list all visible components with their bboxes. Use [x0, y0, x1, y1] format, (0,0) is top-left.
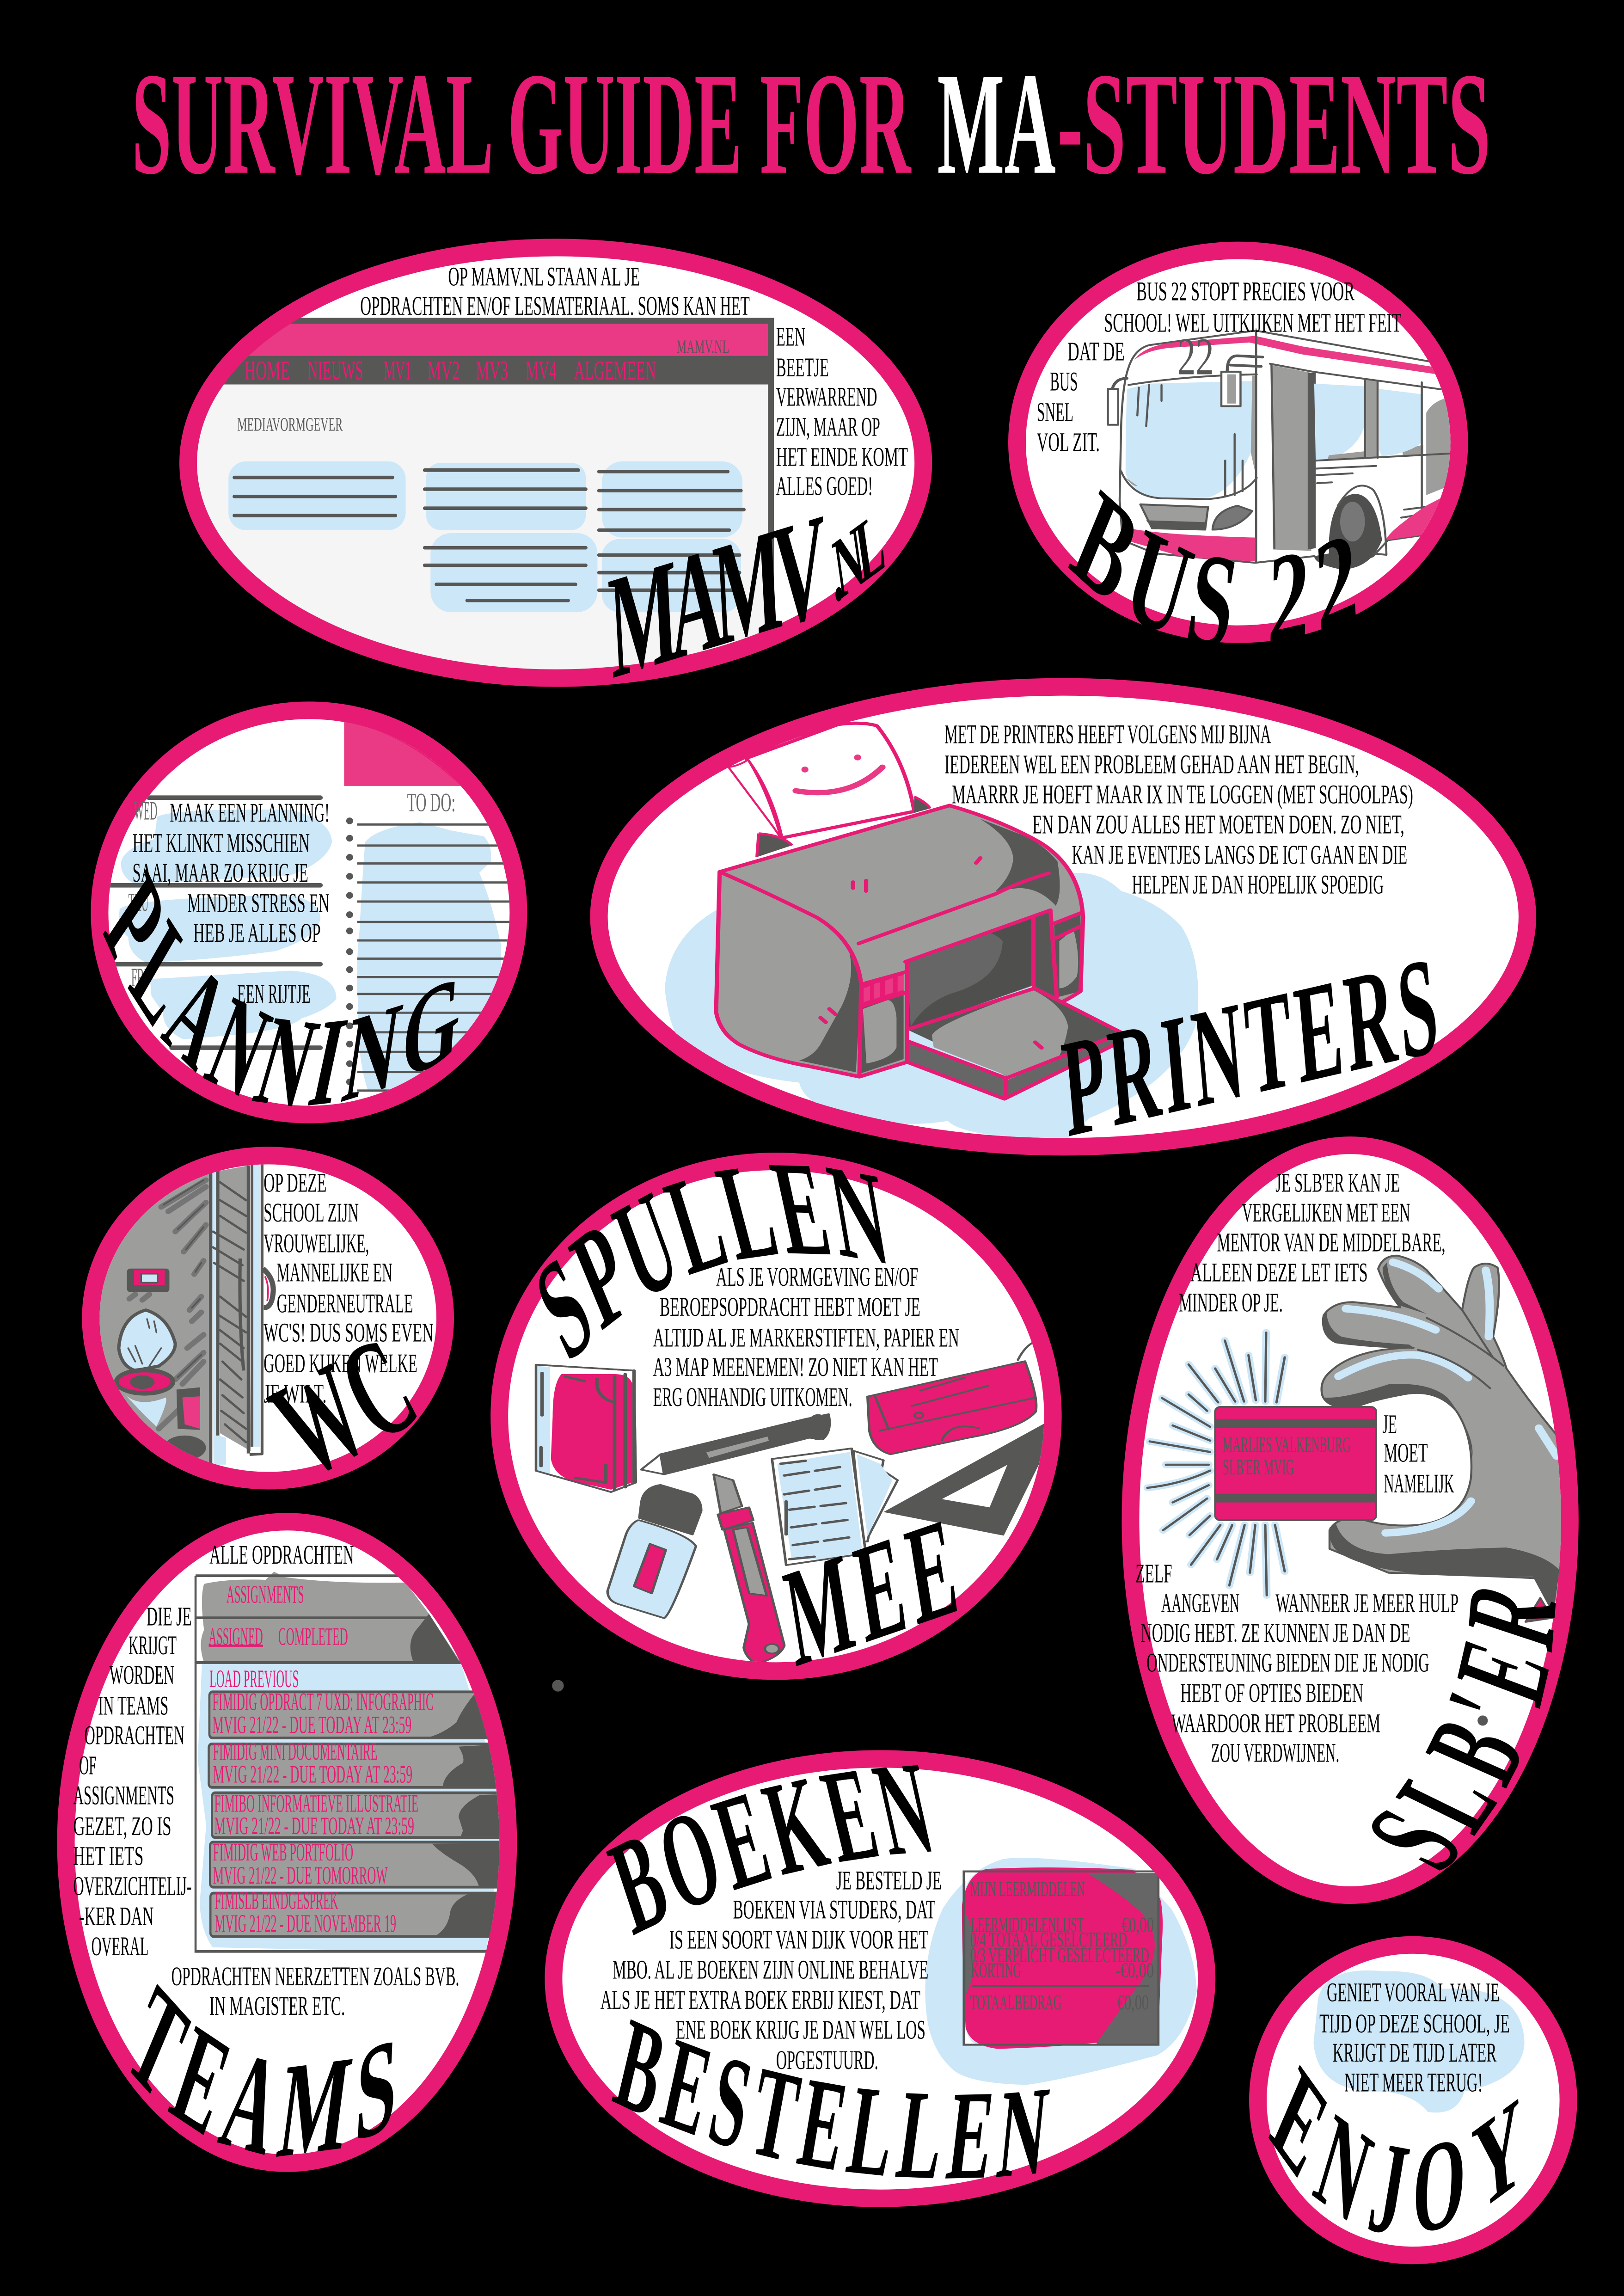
card text: [1223, 1433, 1351, 1480]
bus body text: DAT DE: [1067, 336, 1125, 366]
teams body text: IN TEAMS: [98, 1690, 168, 1720]
printers body text: MET DE PRINTERS HEEFT VOLGENS MIJ BIJNA: [944, 719, 1271, 749]
SLB'er body text: JE SLB'ER KAN JE: [1275, 1168, 1400, 1198]
MAMV body text: ALLES GOED!: [776, 471, 873, 501]
teams body text: -KER DAN: [79, 1901, 154, 1931]
WC body text: JE WILT.: [264, 1378, 326, 1408]
enjoy body text: [1319, 1977, 1510, 2097]
website nav text: [237, 336, 729, 435]
SLB'er body text: MOET: [1384, 1437, 1428, 1467]
planning body text: HEB JE ALLES OP: [193, 918, 321, 948]
printers body text: HELPEN JE DAN HOPELIJK SPOEDIG: [1132, 869, 1384, 899]
website nav text: ALGEMEEN: [574, 355, 656, 385]
teams body text: DIE JE: [147, 1602, 192, 1632]
panel: boeken bestellen: [553, 1717, 1207, 2232]
teams body text: ALLE OPDRACHTEN: [209, 1540, 354, 1570]
hand: [1322, 1256, 1583, 1622]
planning body text: FRI: [131, 963, 147, 992]
marker pen: [641, 1414, 830, 1474]
website nav text: MEDIAVORMGEVER: [237, 413, 343, 435]
planning body text: MAAK EEN PLANNING!: [170, 798, 330, 828]
printers heading: PRINTERS: [1057, 927, 1443, 1167]
planning body text: THU: [129, 888, 148, 917]
bus body text: BUS 22 STOPT PRECIES VOOR: [1136, 276, 1354, 306]
spullen body text: A3 MAP MEENEMEN! ZO NIET KAN HET: [653, 1352, 938, 1382]
printers body text: [944, 719, 1413, 899]
WC body text: MANNELIJKE EN: [277, 1258, 392, 1288]
teams body text: [73, 1540, 459, 2021]
bus body text: VOL ZIT.: [1037, 427, 1100, 457]
boeken body text: IS EEN SOORT VAN DIJK VOOR HET: [669, 1925, 928, 1955]
MAMV body text: [360, 262, 908, 501]
panel: teams: FIMIDIG OPDRACT 7 UXD: INFOGRAPHIC: [212, 1688, 434, 1716]
receipt illustration: [925, 1858, 1197, 2085]
receipt text: -€0,00: [1115, 1958, 1154, 1982]
SLB'er body text: AANGEVEN: [1161, 1588, 1239, 1618]
planning body text: SAAI, MAAR ZO KRIJG JE: [133, 858, 308, 888]
title: MA: [937, 43, 1056, 205]
spullen body text: ALS JE VORMGEVING EN/OF: [716, 1262, 918, 1292]
panel: planning: [91, 701, 527, 1123]
membership card: [1215, 1407, 1376, 1520]
website screenshot illustration: [197, 318, 774, 669]
boeken body text: ENE BOEK KRIJG JE DAN WEL LOS: [676, 2014, 925, 2044]
spullen body text: [653, 1262, 959, 1412]
teams app screenshot: [196, 1572, 518, 1953]
panel: MAMV.NL: [176, 247, 923, 710]
website nav text: MV1: [384, 355, 411, 385]
bus illustration: [1108, 327, 1479, 570]
WC body text: GENDERNEUTRALE: [277, 1288, 413, 1318]
bus heading: BUS 22: [1047, 455, 1385, 700]
teams app text: MVIG 21/22 - DUE TODAY AT 23:59: [214, 1812, 414, 1840]
SLB'er heading: SLB'ER: [1330, 1554, 1611, 1900]
bus body text: [1037, 276, 1401, 457]
spullen body text: ERG ONHANDIG UITKOMEN.: [653, 1382, 852, 1412]
bus body text: SCHOOL! WEL UITKIJKEN MET HET FEIT: [1104, 307, 1401, 338]
panel: teams: FIMIBO INFORMATIEVE ILLUSTRATIE: [214, 1789, 418, 1817]
notebook: [536, 1365, 636, 1492]
boeken body text: BOEKEN VIA STUDERS, DAT: [733, 1895, 936, 1925]
panel: WC: [91, 1155, 445, 1506]
website nav text: HOME: [245, 355, 290, 385]
ink bottle: [607, 1485, 701, 1618]
bus body text: BUS: [1050, 367, 1078, 397]
boeken body text: JE BESTELD JE: [836, 1865, 942, 1895]
spullen heading: SPULLEN: [502, 1093, 916, 1397]
receipt text: €0,00: [1121, 1913, 1154, 1936]
blue blob: [1313, 1971, 1525, 2112]
teams body text: OPDRACHTEN NEERZETTEN ZOALS BVB.: [172, 1961, 459, 1991]
website nav text: MV2: [428, 355, 460, 385]
website nav text: MV4: [526, 355, 557, 385]
WC heading: WC: [250, 1308, 438, 1506]
MAMV body text: ZIJN, MAAR OP: [776, 411, 880, 442]
teams body text: KRIJGT: [129, 1630, 177, 1660]
bus number: 22: [1177, 327, 1214, 386]
WC body text: GOED KIJKEN WELKE: [264, 1348, 417, 1378]
planner illustration: [102, 710, 510, 1091]
SLB'er body text: NODIG HEBT. ZE KUNNEN JE DAN DE: [1141, 1618, 1410, 1648]
paper sheets: [772, 1449, 898, 1565]
cutter knife: [714, 1474, 784, 1664]
teams app text: MVIG 21/22 - DUE TOMORROW: [213, 1861, 388, 1889]
panel: printers: [599, 687, 1527, 1167]
panel: enjoy: [1245, 1945, 1569, 2283]
SLB'er body text: MINDER OP JE.: [1179, 1288, 1283, 1318]
spullen body text: BEROEPSOPDRACHT HEBT MOET JE: [660, 1292, 920, 1322]
receipt text: TOTAALBEDRAG: [970, 1990, 1062, 2014]
boeken body text: [601, 1865, 942, 2075]
SLB'er body text: VERGELIJKEN MET EEN: [1242, 1197, 1410, 1228]
SLB'er body text: MENTOR VAN DE MIDDELBARE,: [1217, 1227, 1446, 1257]
teams app text: ASSIGNMENTS: [227, 1581, 304, 1608]
planning body text: [129, 788, 455, 1009]
enjoy body text: NIET MEER TERUG!: [1344, 2067, 1483, 2097]
SLB'er body text: [1135, 1168, 1459, 1768]
teams app text: [208, 1581, 434, 1937]
SLB'er body text: ZELF: [1135, 1559, 1172, 1589]
teams body text: ASSIGNMENTS: [73, 1780, 174, 1811]
WC body text: VROUWELIJKE,: [264, 1228, 369, 1258]
receipt text: [970, 1877, 1154, 2014]
WC body text: SCHOOL ZIJN: [264, 1197, 359, 1228]
WC body text: WC'S! DUS SOMS EVEN: [264, 1318, 434, 1348]
rays: [1147, 1332, 1285, 1595]
small dot: [1477, 1715, 1488, 1725]
SLB'er body text: NAMELIJK: [1384, 1468, 1454, 1498]
planning body text: TO DO:: [407, 788, 455, 817]
teams body text: HET IETS: [73, 1841, 143, 1871]
bestellen heading: BESTELLEN: [599, 1988, 1063, 2232]
MAMV body text: EEN: [776, 322, 805, 352]
teams body text: WORDEN: [110, 1660, 174, 1690]
spullen body text: ALTIJD AL JE MARKERSTIFTEN, PAPIER EN: [653, 1322, 959, 1352]
card text: MARLIES VALKENBURG: [1223, 1433, 1351, 1457]
receipt text: 0/4 TOTAAL GESELCTEERD: [970, 1928, 1128, 1951]
receipt text: LEERMIDDELENLIJST: [971, 1913, 1084, 1936]
teams app text: COMPLETED: [278, 1623, 348, 1651]
teams app text: FIMISLB EINDGESPREK: [214, 1886, 338, 1914]
MAMV body text: VERWARREND: [776, 381, 877, 411]
receipt text: KORTING: [971, 1958, 1021, 1982]
teams app text: ASSIGNED: [208, 1623, 263, 1651]
MAMV body text: BEETJE: [776, 352, 829, 382]
panel: spullen mee: [499, 1093, 1053, 1697]
SLB'er body text: WAARDOOR HET PROBLEEM: [1171, 1708, 1380, 1738]
teams body text: OVERAL: [92, 1931, 148, 1961]
teams app text: FIMIDIG WEB PORTFOLIO: [213, 1838, 353, 1866]
teams app text: MVIG 21/22 - DUE TODAY AT 23:59: [213, 1761, 412, 1788]
mee heading: MEE: [776, 1487, 966, 1697]
MAMV body text: OPDRACHTEN EN/OF LESMATERIAAL. SOMS KAN HET: [360, 291, 750, 321]
teams body text: GEZET, ZO IS: [73, 1811, 172, 1841]
teams body text: OVERZICHTELIJ-: [73, 1871, 192, 1901]
boeken body text: OPGESTUURD.: [776, 2045, 878, 2075]
WC body text: [264, 1168, 434, 1408]
toilet illustration: [93, 1160, 273, 1473]
teams body text: OPDRACHTEN: [84, 1720, 184, 1750]
pink pencil case: [868, 1341, 1036, 1454]
card text: SLB'ER MVIG: [1223, 1455, 1294, 1480]
planning body text: HET KLINKT MISSCHIEN: [133, 828, 310, 858]
website nav text: MV3: [476, 355, 508, 385]
teams app text: FIMIDIG MINI DOCUMENTAIRE: [213, 1737, 377, 1765]
receipt text: €0,00: [1117, 1990, 1149, 2014]
boeken body text: ALS JE HET EXTRA BOEK ERBIJ KIEST, DAT: [601, 1985, 920, 2015]
SLB'er body text: HEBT OF OPTIES BIEDEN: [1180, 1678, 1363, 1708]
hand holding card illustration: [1147, 1256, 1583, 1622]
bus body text: SNEL: [1037, 397, 1073, 427]
MAMV heading: .NL: [824, 491, 889, 622]
small grey dot: [552, 1680, 564, 1692]
teams heading: TEAMS: [98, 1949, 426, 2212]
panel: SLB'er: [1130, 1145, 1611, 1900]
panel: teams: [66, 1522, 518, 2212]
planning body text: EEN RIJTJE: [237, 979, 311, 1009]
teams app text: MVIG 21/22 - DUE NOVEMBER 19: [214, 1909, 396, 1937]
boeken heading: BOEKEN: [590, 1717, 951, 1965]
enjoy heading: ENJOY: [1245, 2032, 1549, 2283]
teams body text: OF: [79, 1750, 96, 1780]
planning body text: MINDER STRESS EN: [187, 888, 330, 918]
panel: bus 22: [1008, 241, 1468, 643]
teams app text: MVIG 21/22 - DUE TODAY AT 23:59: [212, 1711, 411, 1738]
MAMV body text: HET EINDE KOMT: [776, 442, 908, 472]
SLB'er body text: WANNEER JE MEER HULP: [1275, 1588, 1459, 1618]
teams body text: IN MAGISTER ETC.: [209, 1991, 345, 2021]
teams app text: LOAD PREVIOUS: [209, 1665, 299, 1693]
MAMV heading: MAMV: [605, 481, 830, 710]
SLB'er body text: ZOU VERDWIJNEN.: [1211, 1738, 1339, 1768]
supplies illustration: [536, 1341, 1046, 1664]
boeken body text: MBO. AL JE BOEKEN ZIJN ONLINE BEHALVE: [613, 1955, 928, 1985]
receipt text: MIJN LEERMIDDELEN: [970, 1877, 1085, 1901]
website nav text: MAMV.NL: [676, 336, 729, 357]
triangle ruler: [883, 1423, 1046, 1535]
SLB'er body text: ALLEEN DEZE LET IETS: [1190, 1258, 1368, 1288]
receipt text: 0/3 VERPLICHT GESELECTEERD: [970, 1943, 1149, 1967]
MAMV body text: OP MAMV.NL STAAN AL JE: [448, 262, 640, 292]
printer illustration: [665, 723, 1198, 1139]
planning body text: WED: [134, 796, 157, 825]
website nav text: NIEUWS: [307, 355, 363, 385]
planning heading: PLANNING: [50, 831, 497, 1188]
SLB'er body text: JE: [1382, 1409, 1397, 1439]
enjoy body text: KRIJGT DE TIJD LATER: [1333, 2038, 1496, 2068]
WC body text: OP DEZE: [264, 1168, 326, 1198]
